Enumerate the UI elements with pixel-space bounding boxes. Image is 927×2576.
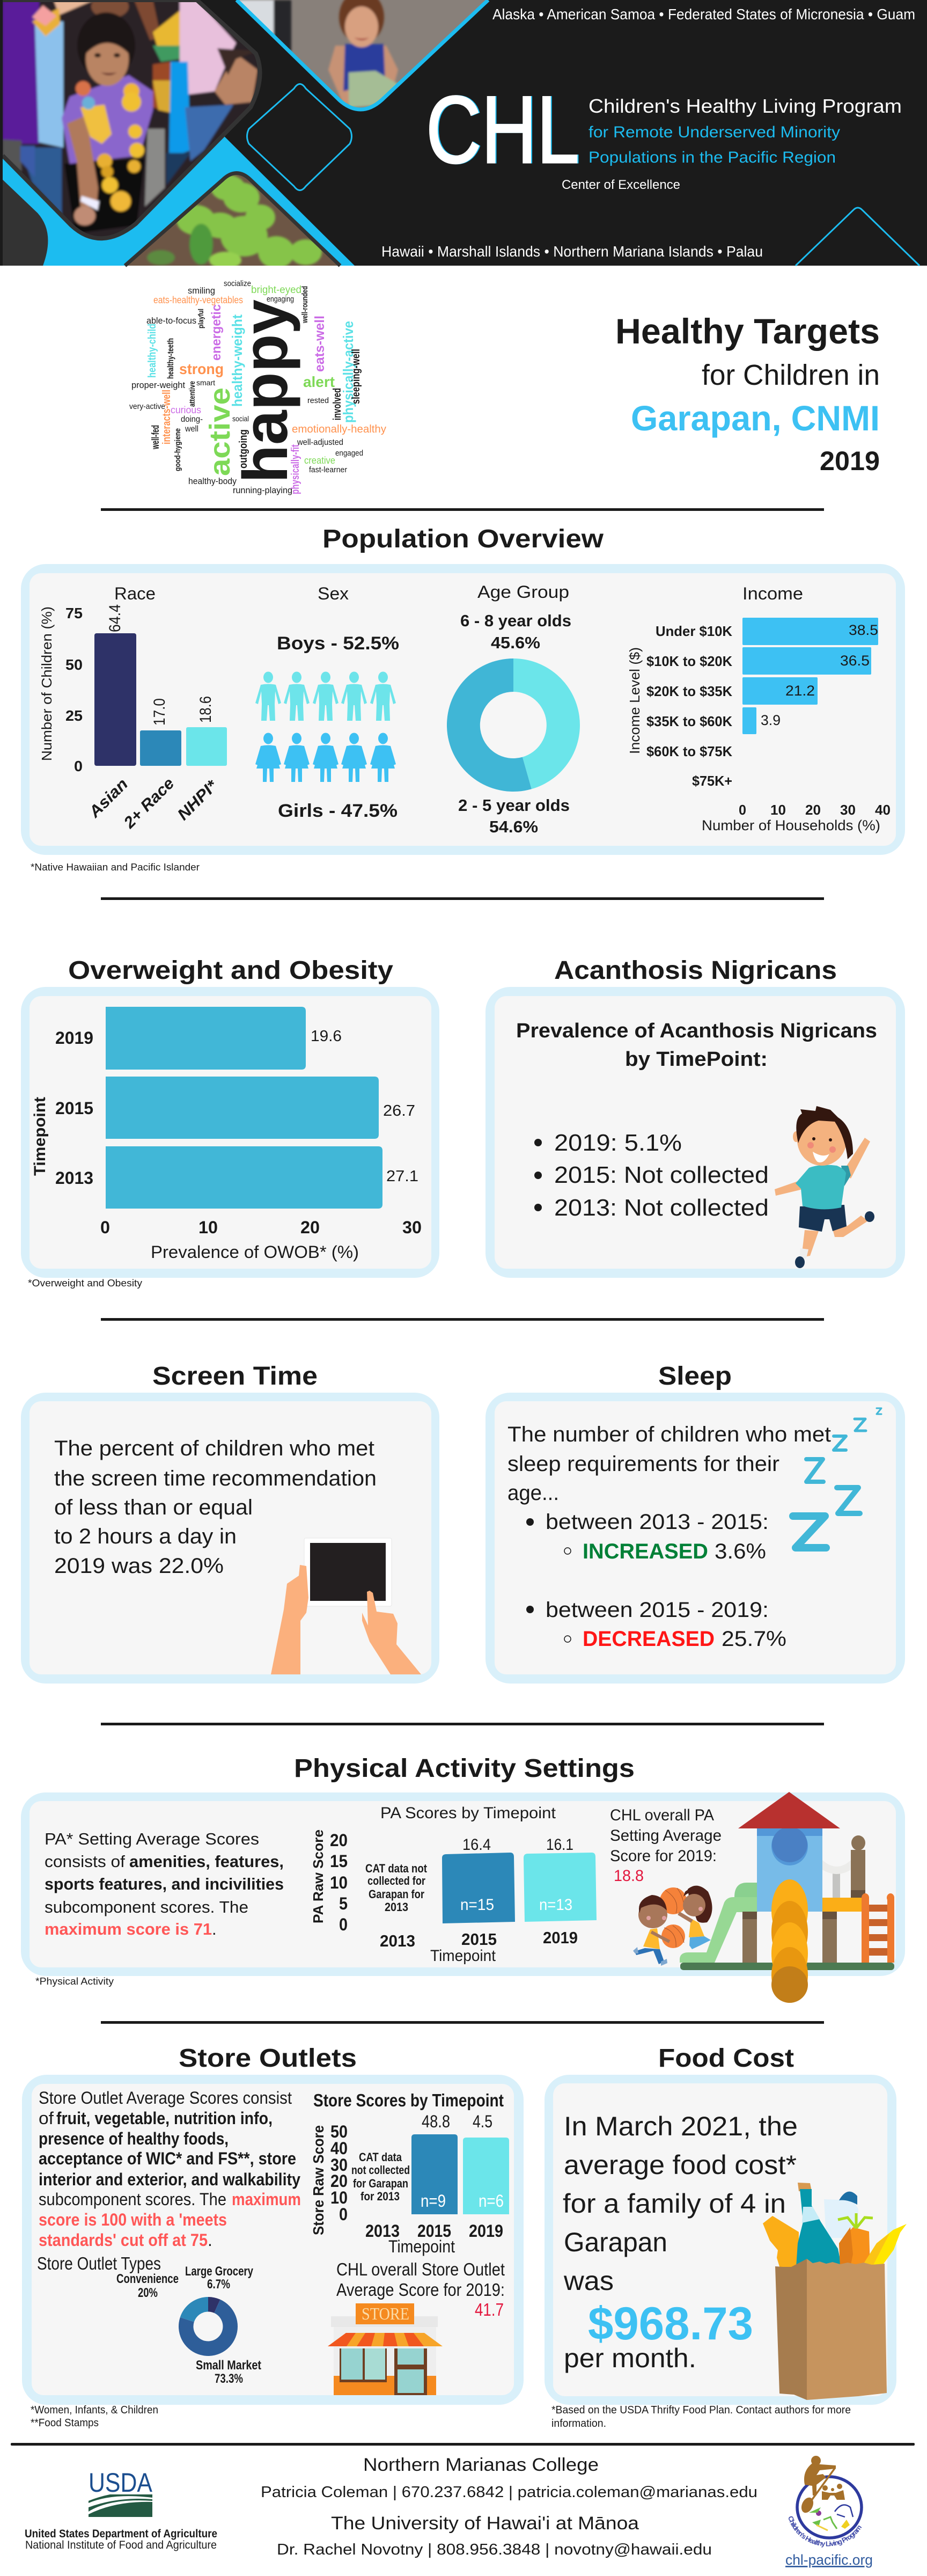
race chart: 64.4 (106, 604, 124, 632)
word cloud: well (185, 425, 198, 434)
chart: store outlet types donut (37, 2253, 261, 2386)
logo: CHL pacific (785, 2456, 873, 2568)
age group donut: Age Group (477, 582, 569, 602)
race chart: 17.0 (151, 698, 168, 726)
program name: for Remote Underserved Minority (588, 123, 840, 141)
chart: store scores by timepoint: 2015 (417, 2221, 451, 2241)
text block: interior and exterior, and walkability (39, 2170, 300, 2189)
callout: CHL overall PA score: CHL overall PA (610, 1806, 714, 1824)
text block: sleep requirements for their (507, 1452, 779, 1476)
word cloud: bright-eyed (251, 284, 301, 296)
footnotes: **Food Stamps (31, 2417, 99, 2429)
logo: CHL pacific: Children's Healthy Living Program (789, 2516, 862, 2548)
text block: presence of healthy foods, (39, 2129, 229, 2148)
chart: store scores by timepoint: 40 (330, 2139, 348, 2158)
word cloud: playful (196, 309, 205, 328)
income chart: 3.9 (761, 712, 781, 728)
word cloud: doing- (181, 415, 203, 424)
word cloud: sleeping-well (350, 349, 362, 404)
chart: store outlet types donut: Convenience (116, 2272, 179, 2286)
race chart: 0 (74, 758, 83, 774)
chart: store scores by timepoint: 50 (330, 2122, 348, 2141)
bar chart: 19.6 (311, 1028, 342, 1045)
chart: store outlet types donut: 6.7% (207, 2277, 230, 2292)
income chart: Under $10K (656, 623, 732, 639)
text block (54, 1437, 377, 1578)
chart: PA scores by timepoint (310, 1804, 597, 1965)
panel: sleep (485, 1393, 905, 1684)
title block: Garapan, CNMI (631, 398, 880, 438)
text block: was (563, 2266, 614, 2296)
chart: store scores by timepoint: 20 (330, 2171, 348, 2191)
logo: CHL pacific: chl-pacific.org (785, 2552, 873, 2568)
text block: 25.7% (722, 1627, 786, 1651)
text block: subcomponent scores. The (45, 1898, 248, 1916)
dark corner (3, 180, 48, 266)
income chart: $20K to $35K (646, 683, 732, 699)
word cloud: well-rounded (300, 286, 310, 324)
word cloud: fast-learner (309, 465, 347, 474)
race chart: NHPI* (174, 777, 222, 824)
text block: acceptance of WIC* and FS**, store (39, 2149, 296, 2168)
text block: Store Outlet Average Scores consist (39, 2088, 292, 2107)
text block: per month. (564, 2343, 696, 2373)
income chart: 0 (739, 802, 746, 818)
footnote: *Based on the USDA Thrifty Food Plan. Contact authors for more (551, 2404, 851, 2416)
bar chart: Timepoint (31, 1097, 49, 1176)
text block: PA* Setting Average Scores (45, 1829, 259, 1848)
chart: store scores by timepoint: for 2013 (360, 2190, 400, 2203)
chart: store scores by timepoint: n=6 (479, 2191, 504, 2211)
word cloud: strong (179, 361, 224, 377)
word cloud (129, 279, 386, 495)
word cloud: healthy-weight (229, 314, 245, 407)
callout: CHL overall store score: 41.7 (475, 2300, 504, 2319)
program name: Children's Healthy Living Program (588, 95, 902, 117)
contact block: Patricia Coleman | 670.237.6842 | patricia.coleman@marianas.edu (261, 2484, 757, 2501)
text block: between 2015 - 2019: (546, 1598, 769, 1622)
chart: store outlet types donut: 20% (138, 2286, 158, 2300)
chart: store scores by timepoint: for Garapan (353, 2177, 408, 2190)
illustration: store front (328, 2303, 443, 2395)
footnotes: *Women, Infants, & Children (31, 2404, 158, 2416)
income chart: 40 (875, 802, 891, 818)
text block: of less than or equal (54, 1496, 253, 1519)
bar chart: Prevalence of OWOB* (%) (151, 1242, 359, 1262)
word cloud: smart (196, 378, 215, 387)
photo: lettuce garden (123, 171, 341, 267)
callout: CHL overall store score (336, 2259, 505, 2319)
word cloud: happy (230, 299, 301, 483)
text block: . (212, 1920, 217, 1938)
word cloud: smiling (188, 286, 215, 296)
income chart: 30 (840, 802, 856, 818)
text block: amenities, features, (129, 1852, 284, 1871)
chart: store scores by timepoint: Store Raw Score (310, 2125, 327, 2235)
illustration: store front: STORE (362, 2304, 409, 2323)
chart: PA scores by timepoint: 2019 (543, 1928, 578, 1947)
photo: girl with leis (0, 0, 268, 247)
chart: PA scores by timepoint: n=15 (460, 1896, 494, 1914)
word cloud: able-to-focus (146, 316, 196, 326)
text block: In March 2021, the (564, 2111, 798, 2141)
word cloud: eats-well (312, 316, 327, 372)
chart: store scores by timepoint: 10 (330, 2188, 348, 2207)
word cloud: well-adjusted (297, 438, 343, 447)
income chart: Income Level ($) (627, 647, 643, 754)
panel: overweight and obesity (21, 987, 439, 1278)
chart: PA scores by timepoint: Garapan for (369, 1887, 424, 1901)
chart: PA scores by timepoint: 2013 (380, 1931, 415, 1950)
bulleted list: 2015: Not collected (554, 1162, 769, 1188)
text block: score is 100 with a 'meets (39, 2210, 227, 2229)
text block: standards' cut off at 75 (39, 2230, 208, 2250)
text block: to 2 hours a day in (54, 1525, 237, 1548)
logo: USDA (25, 2468, 217, 2551)
word cloud: rested (307, 396, 329, 405)
chart: PA scores by timepoint: collected for (367, 1874, 425, 1887)
income chart: 38.5 (849, 622, 878, 638)
text block: The percent of children who met (54, 1437, 374, 1460)
footnote: information. (551, 2418, 606, 2429)
illustration: grocery bag (763, 2183, 907, 2400)
heading: Overweight and Obesity: Overweight and Obesity (68, 956, 393, 985)
age group donut: 6 - 8 year olds (460, 611, 571, 630)
text block: fruit, vegetable, nutrition info, (56, 2109, 273, 2128)
bulleted list (534, 1130, 769, 1221)
callout: CHL overall PA score: 18.8 (614, 1867, 644, 1885)
word cloud: emotionally-healthy (292, 423, 386, 435)
bar chart: 20 (300, 1218, 320, 1237)
word cloud: physically-active (340, 321, 356, 423)
chart: PA scores by timepoint: 16.4 (462, 1836, 491, 1854)
income chart (627, 584, 891, 833)
income chart: $35K to $60K (646, 713, 732, 729)
header banner (0, 0, 927, 269)
footnote: *Physical Activity (35, 1976, 114, 1987)
bar chart: 2015 (55, 1099, 93, 1118)
word cloud: curious (171, 405, 201, 415)
bar chart (31, 1007, 422, 1262)
text block: maximum (232, 2190, 301, 2209)
heading: Physical Activity Settings: Physical Activity Settings (294, 1754, 635, 1783)
logo: USDA: National Institute of Food and Agriculture (25, 2539, 217, 2551)
income chart: Income (742, 584, 803, 603)
chart: PA scores by timepoint: 20 (330, 1831, 348, 1850)
chart: store scores by timepoint: not collected (351, 2163, 410, 2177)
income chart: 20 (805, 802, 821, 818)
callout: CHL overall PA score: Score for 2019: (610, 1847, 717, 1865)
race chart: 2+ Race (120, 774, 178, 832)
chart: store scores by timepoint: 2019 (469, 2221, 503, 2241)
income chart: Number of Households (%) (702, 817, 880, 833)
text block (507, 1423, 831, 1651)
title block: 2019 (820, 446, 880, 476)
bar chart: 30 (402, 1218, 422, 1237)
text block: . (208, 2230, 212, 2250)
chart: store scores by timepoint: 0 (339, 2205, 348, 2224)
chart: store outlet types donut: Small Market (196, 2358, 261, 2373)
chart: PA scores by timepoint: Timepoint (430, 1947, 496, 1965)
sex breakdown (255, 584, 399, 821)
callout: CHL overall store score: CHL overall Store Outlet (336, 2259, 505, 2279)
age group donut (447, 582, 580, 836)
text block: for a family of 4 in (563, 2189, 786, 2219)
word cloud: energetic (209, 304, 224, 361)
footnote (551, 2404, 851, 2429)
illustration: tablet and hands (271, 1538, 421, 1674)
triangle outline (796, 208, 919, 266)
chart: PA scores by timepoint: 0 (339, 1915, 348, 1934)
bar chart: 2013 (55, 1168, 93, 1188)
illustration: children with basketballs (633, 1886, 712, 1966)
footnote: *Native Hawaiian and Pacific Islander (31, 862, 200, 873)
word cloud: healthy-body (188, 476, 237, 486)
word cloud: engaged (335, 449, 363, 458)
diamond outline (247, 84, 352, 190)
heading: Food Cost: Food Cost (658, 2044, 794, 2073)
chart: PA scores by timepoint: n=13 (539, 1896, 572, 1914)
text block: subcomponent scores. The (39, 2190, 226, 2209)
word cloud: healthy-child (146, 324, 158, 378)
illustration: running boy (775, 1106, 874, 1268)
race chart: Race (114, 584, 156, 603)
text block: DECREASED (583, 1627, 715, 1651)
text block: age... (507, 1481, 559, 1505)
program name: Populations in the Pacific Region (588, 149, 836, 166)
text block: $968.73 (588, 2298, 753, 2350)
word cloud: socialize (224, 279, 251, 288)
income chart: 36.5 (840, 653, 870, 669)
chart: PA scores by timepoint: PA Scores by Timepoint (380, 1804, 556, 1822)
chart: store scores by timepoint: Timepoint (388, 2237, 455, 2256)
heading: Sleep: Sleep (658, 1362, 732, 1391)
text block: Garapan (564, 2227, 667, 2257)
word cloud: healthy-teeth (166, 338, 175, 379)
panel: acanthosis nigricans: by TimePoint: (625, 1048, 768, 1071)
heading: Acanthosis Nigricans: Acanthosis Nigricans (554, 956, 837, 985)
word cloud: alert (303, 374, 335, 390)
chart: store scores by timepoint (310, 2090, 509, 2256)
bulleted list: 2019: 5.1% (554, 1130, 682, 1156)
chart: store scores by timepoint: n=9 (421, 2191, 446, 2211)
text block: 3.6% (715, 1540, 766, 1563)
chart: store outlet types donut: Large Grocery (185, 2264, 254, 2279)
blue swoosh (3, 136, 355, 266)
callout: CHL overall PA score (610, 1806, 722, 1885)
word cloud: interacts-well (161, 390, 173, 444)
text block: sports features, and incivilities (45, 1875, 284, 1893)
contact block (261, 2455, 757, 2558)
word cloud: running-playing (233, 485, 292, 495)
race chart: 18.6 (197, 696, 215, 723)
panel: physical activity settings (21, 1792, 905, 2003)
sex breakdown: Boys - 52.5% (277, 633, 399, 654)
panel: screen time (21, 1393, 439, 1684)
text block: consists of (45, 1852, 125, 1871)
income chart: 21.2 (785, 683, 815, 699)
age group donut: 45.6% (491, 633, 540, 652)
word cloud: well-fed (150, 425, 161, 450)
illustration: playground (680, 1792, 894, 2003)
bulleted list: 2013: Not collected (554, 1195, 769, 1221)
program name (562, 95, 902, 192)
text block: The number of children who met (507, 1423, 831, 1446)
chart: PA scores by timepoint: CAT data not (365, 1862, 428, 1875)
panel: food cost (545, 2075, 907, 2405)
chart: store scores by timepoint: Store Scores by Timepoint (313, 2090, 504, 2110)
callout: CHL overall store score: Average Score for 2019: (336, 2280, 505, 2300)
contact block: The University of Hawai'i at Mānoa (331, 2513, 639, 2534)
text block (563, 2111, 798, 2373)
bar chart: 27.1 (386, 1168, 418, 1185)
word cloud: very-active (129, 402, 165, 411)
bar chart: 10 (198, 1218, 218, 1237)
chart: PA scores by timepoint: 15 (330, 1851, 348, 1871)
contact block: Northern Marianas College (363, 2455, 599, 2475)
title block (615, 311, 880, 476)
photo: toddler with bag of beans (239, 0, 485, 107)
icon: sleeping Zs (793, 1408, 881, 1548)
race chart: 25 (65, 707, 83, 724)
panel: population overview (21, 564, 905, 855)
panel: store outlets (22, 2075, 524, 2405)
logo text CHL: CHL (426, 76, 579, 183)
chart: store outlet types donut: 73.3% (215, 2372, 243, 2386)
chart: PA scores by timepoint: PA Raw Score (310, 1829, 326, 1923)
bar chart: 26.7 (383, 1102, 415, 1119)
income chart: $75K+ (692, 773, 732, 789)
age group donut: 2 - 5 year olds (458, 796, 570, 815)
race chart: 50 (65, 656, 83, 673)
program name: Center of Excellence (562, 178, 680, 192)
icons: girls (255, 733, 396, 782)
race chart: Number of Children (%) (39, 606, 55, 761)
contact block: Dr. Rachel Novotny | 808.956.3848 | novotny@hawaii.edu (277, 2541, 712, 2558)
sex breakdown: Girls - 47.5% (278, 801, 398, 821)
word cloud: involved (332, 388, 343, 420)
heading: Store Outlets: Store Outlets (179, 2044, 357, 2073)
logo: USDA: USDA (89, 2468, 153, 2498)
text block (45, 1829, 284, 1938)
title block: Healthy Targets (615, 311, 880, 351)
panel: acanthosis nigricans: Prevalence of Acanthosis Nigricans (516, 1020, 877, 1042)
title block: for Children in (702, 359, 880, 391)
icons: boys (255, 672, 396, 721)
word cloud: physically-fit (290, 444, 301, 494)
chart: PA scores by timepoint: 5 (339, 1894, 348, 1913)
text block: 2019 was 22.0% (54, 1554, 224, 1578)
text block: maximum score is 71 (45, 1920, 212, 1938)
logo: USDA: United States Department of Agriculture (25, 2528, 217, 2540)
bar chart: 0 (100, 1218, 110, 1237)
income chart: $60K to $75K (646, 743, 732, 759)
word cloud: eats-healthy-vegetables (153, 295, 243, 305)
chart: store outlet types donut: Store Outlet Types (37, 2253, 161, 2273)
jurisdictions bottom: Hawaii • Marshall Islands • Northern Mariana Islands • Palau (381, 243, 763, 260)
heading: Population Overview: Population Overview (322, 525, 604, 553)
income chart: $10K to $20K (646, 653, 732, 669)
sex breakdown: Sex (318, 584, 349, 603)
chart: store scores by timepoint: 2013 (365, 2221, 400, 2241)
chart: PA scores by timepoint: 10 (330, 1873, 348, 1892)
chart: PA scores by timepoint: 16.1 (546, 1836, 573, 1854)
word cloud: active (204, 387, 236, 476)
text block (39, 2088, 301, 2250)
footnote: *Overweight and Obesity (28, 1278, 142, 1289)
panel: acanthosis nigricans (485, 987, 905, 1278)
bar chart: 2019 (55, 1028, 93, 1048)
chart: PA scores by timepoint: 2015 (461, 1930, 497, 1949)
chart: store scores by timepoint: CAT data (359, 2150, 402, 2164)
text block: the screen time recommendation (54, 1467, 377, 1490)
race chart: Asian (85, 775, 131, 822)
word cloud: creative (304, 455, 335, 466)
word cloud: social (232, 414, 249, 423)
footnotes (31, 2404, 158, 2429)
chart: PA scores by timepoint: 2013 (385, 1900, 408, 1914)
age group donut: 54.6% (489, 817, 538, 836)
race chart: 75 (65, 605, 83, 621)
chart: store scores by timepoint: 4.5 (473, 2112, 492, 2131)
chart: store scores by timepoint: 48.8 (422, 2112, 450, 2131)
word cloud: engaging (267, 295, 294, 304)
word cloud: good-hygiene (173, 428, 182, 471)
heading: Screen Time: Screen Time (152, 1362, 318, 1391)
chart: store scores by timepoint: 30 (330, 2155, 348, 2175)
text block: of (39, 2109, 54, 2128)
callout: CHL overall PA score: Setting Average (610, 1827, 722, 1845)
text block: between 2013 - 2015: (546, 1510, 769, 1534)
word cloud: attentive (188, 381, 197, 407)
word cloud: outgoing (238, 429, 249, 469)
race chart (39, 584, 227, 832)
text block: average food cost* (564, 2150, 797, 2180)
word cloud: proper-weight (131, 380, 185, 390)
text block: INCREASED (583, 1540, 708, 1563)
income chart: 10 (770, 802, 786, 818)
